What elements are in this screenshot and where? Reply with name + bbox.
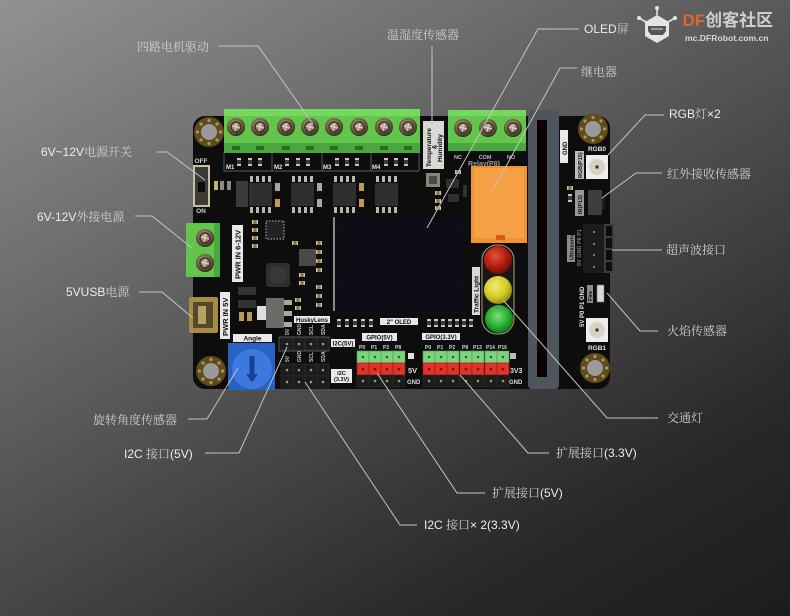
USB port bbox=[189, 297, 218, 333]
traffic light label: Traffic Light bbox=[474, 275, 480, 313]
callout: ultrasonic port bbox=[612, 242, 726, 257]
callout: rotary angle sensor bbox=[93, 368, 238, 427]
HuskyLens I2C header: SCL bbox=[309, 352, 315, 362]
mounting holes bbox=[194, 114, 610, 386]
GPIO 5V header: 5V bbox=[408, 366, 417, 375]
HuskyLens I2C header: SCL bbox=[309, 325, 315, 335]
GPIO 3.3V header: P13 bbox=[473, 345, 482, 351]
callout: flame sensor bbox=[607, 293, 727, 338]
motor channel labels M1-M4: M4 bbox=[372, 165, 381, 171]
GPIO 5V header bbox=[357, 333, 421, 387]
fire sensor bbox=[580, 285, 604, 327]
callout: USB power: 5VUSB电源 bbox=[66, 284, 130, 299]
ultrasonic connector: 5V GND P8 P1 bbox=[577, 229, 583, 266]
micro:bit edge slot bbox=[528, 110, 559, 389]
HuskyLens I2C header: SDA bbox=[321, 324, 327, 335]
GPIO 5V header: P8 bbox=[395, 345, 401, 351]
GPIO 5V header: P0 bbox=[359, 345, 365, 351]
RGB LED 1: RGB1 bbox=[588, 345, 606, 352]
logo url: mc.DFRobot.com.cn bbox=[685, 33, 769, 43]
HuskyLens I2C header: (3.3V) bbox=[334, 377, 349, 383]
HuskyLens I2C header: 5V bbox=[285, 355, 291, 362]
RGB LED 0: RGB0 bbox=[588, 146, 606, 153]
RGB LED 0 bbox=[575, 146, 608, 179]
callout: RGB lights bbox=[608, 106, 721, 155]
HuskyLens I2C header: GND bbox=[297, 324, 303, 335]
callout: expansion port 5V bbox=[377, 373, 563, 500]
callout: traffic light: 交通灯 bbox=[667, 410, 703, 425]
RGB LED 1 bbox=[586, 318, 608, 352]
HuskyLens I2C header: SDA bbox=[321, 351, 327, 362]
infrared receiver bbox=[567, 186, 605, 216]
OLED screen bbox=[333, 217, 465, 314]
temperature sensor: Temperature bbox=[426, 128, 433, 167]
GPIO 3.3V header: GND bbox=[509, 380, 523, 386]
GPIO 3.3V header: 3V3 bbox=[510, 368, 523, 375]
power switch: ON bbox=[196, 208, 206, 215]
infrared receiver: IR(P13) bbox=[578, 195, 584, 214]
callout: flame sensor: 火焰传感器 bbox=[667, 323, 727, 338]
GPIO 3.3V header bbox=[422, 333, 523, 387]
HuskyLens I2C header bbox=[279, 316, 355, 388]
relay labels: Relay(P8) bbox=[468, 161, 500, 168]
callout: relay bbox=[493, 64, 617, 190]
GPIO 5V header: GND bbox=[407, 380, 421, 386]
motor channel labels M1-M4: M3 bbox=[323, 165, 332, 171]
relay labels: COM bbox=[479, 155, 492, 161]
GPIO 3.3V header: P1 bbox=[437, 345, 443, 351]
power switch: OFF bbox=[194, 158, 208, 165]
callout: relay: 继电器 bbox=[581, 64, 617, 79]
power terminal block bbox=[186, 223, 220, 277]
callout: I2C port x2 3.3V bbox=[305, 382, 520, 532]
GPIO 3.3V header: GPIO(3.3V) bbox=[425, 335, 457, 341]
motor channel labels M1-M4: M2 bbox=[274, 165, 283, 171]
callout: I2C port 5V bbox=[124, 347, 287, 461]
power input label: PWR IN 6-12V bbox=[234, 230, 242, 279]
logo: DF community bbox=[637, 6, 773, 43]
callout: power switch bbox=[41, 144, 205, 180]
relay terminal block bbox=[448, 110, 526, 151]
callout: power switch: 6V~12V电源开关 bbox=[41, 144, 132, 159]
GPIO 3.3V header: P0 bbox=[425, 345, 431, 351]
callout: I2C port 5V: I2C 接口(5V) bbox=[124, 446, 193, 461]
callout: ultrasonic port: 超声波接口 bbox=[666, 242, 726, 257]
fire sensor: Fire bbox=[588, 291, 594, 301]
GPIO 3.3V header: P16 bbox=[498, 345, 507, 351]
expansion board bbox=[186, 109, 614, 390]
callout: infrared receiver bbox=[602, 166, 751, 198]
angle potentiometer bbox=[228, 334, 275, 390]
fire sensor: 5V P0 P1 GND bbox=[580, 286, 586, 327]
relay labels bbox=[454, 155, 516, 168]
callout: OLED screen bbox=[427, 22, 629, 228]
ultrasonic connector: Ultrasonic bbox=[570, 233, 576, 260]
callout: external power: 6V-12V外接电源 bbox=[37, 209, 125, 224]
OLED label bbox=[380, 318, 418, 326]
motor channel labels M1-M4 bbox=[224, 153, 419, 171]
callout: temperature and humidity sensor bbox=[387, 27, 459, 125]
GND label bbox=[560, 130, 569, 163]
callout: RGB lights: RGB灯×2 bbox=[669, 106, 721, 121]
GPIO 5V header: P1 bbox=[371, 345, 377, 351]
callout: expansion port 3.3V: 扩展接口(3.3V) bbox=[556, 445, 637, 460]
traffic light label bbox=[472, 267, 480, 315]
GPIO 3.3V header: P8 bbox=[462, 345, 468, 351]
temperature sensor: & bbox=[432, 144, 438, 149]
board body bbox=[193, 116, 610, 389]
logo name: DF创客社区 bbox=[682, 10, 773, 30]
small parts under OLED bbox=[337, 319, 473, 327]
relay bbox=[471, 166, 527, 243]
traffic light bbox=[482, 245, 514, 334]
motor terminal block bbox=[224, 109, 420, 153]
callout: temperature and humidity sensor: 温湿度传感器 bbox=[387, 27, 459, 42]
relay labels: NC bbox=[454, 155, 462, 161]
callout: external power bbox=[37, 209, 192, 248]
HuskyLens I2C header: 5V bbox=[285, 328, 291, 335]
USB power label: PWR IN 5V bbox=[221, 298, 230, 336]
logic chips bbox=[252, 220, 322, 285]
HuskyLens I2C header: HuskyLens bbox=[296, 318, 329, 324]
motor driver chips bbox=[214, 176, 398, 213]
callout: four motor drive: 四路电机驱动 bbox=[137, 39, 209, 54]
icon: robot head bbox=[637, 6, 677, 43]
callout: four motor drive bbox=[137, 39, 313, 124]
callout: I2C port x2 3.3V: I2C 接口× 2(3.3V) bbox=[424, 517, 520, 532]
GPIO 3.3V header: P14 bbox=[486, 345, 495, 351]
callout: OLED screen: OLED屏 bbox=[584, 22, 629, 36]
callout: rotary angle sensor: 旋转角度传感器 bbox=[93, 412, 177, 427]
motor channel labels M1-M4: M1 bbox=[226, 165, 235, 171]
HuskyLens I2C header: I2C bbox=[337, 371, 346, 377]
HuskyLens I2C header: GND bbox=[297, 350, 303, 362]
GPIO 5V header: GPIO(5V) bbox=[366, 336, 393, 342]
callout: USB power bbox=[66, 284, 193, 318]
power components bbox=[238, 263, 322, 328]
GPIO 5V header: P2 bbox=[383, 345, 389, 351]
callout: expansion port 3.3V bbox=[460, 375, 637, 460]
OLED label: 2" OLED bbox=[387, 320, 412, 326]
relay labels: NO bbox=[507, 155, 516, 161]
ultrasonic connector bbox=[567, 224, 614, 273]
RGB LED 0: RGB(P15) bbox=[578, 152, 584, 178]
callout: expansion port 5V: 扩展接口(5V) bbox=[492, 485, 563, 500]
temperature sensor: Humidity bbox=[437, 134, 444, 162]
angle potentiometer: Angle bbox=[243, 336, 262, 342]
power switch bbox=[193, 158, 210, 215]
small parts near relay bbox=[435, 170, 467, 210]
GND label: GND bbox=[563, 141, 569, 155]
callout: traffic light bbox=[503, 300, 703, 425]
HuskyLens I2C header: I2C(5V) bbox=[333, 342, 353, 348]
callout: infrared receiver: 红外接收传感器 bbox=[667, 166, 751, 181]
temperature sensor bbox=[423, 121, 444, 187]
GPIO 3.3V header: P2 bbox=[449, 345, 455, 351]
